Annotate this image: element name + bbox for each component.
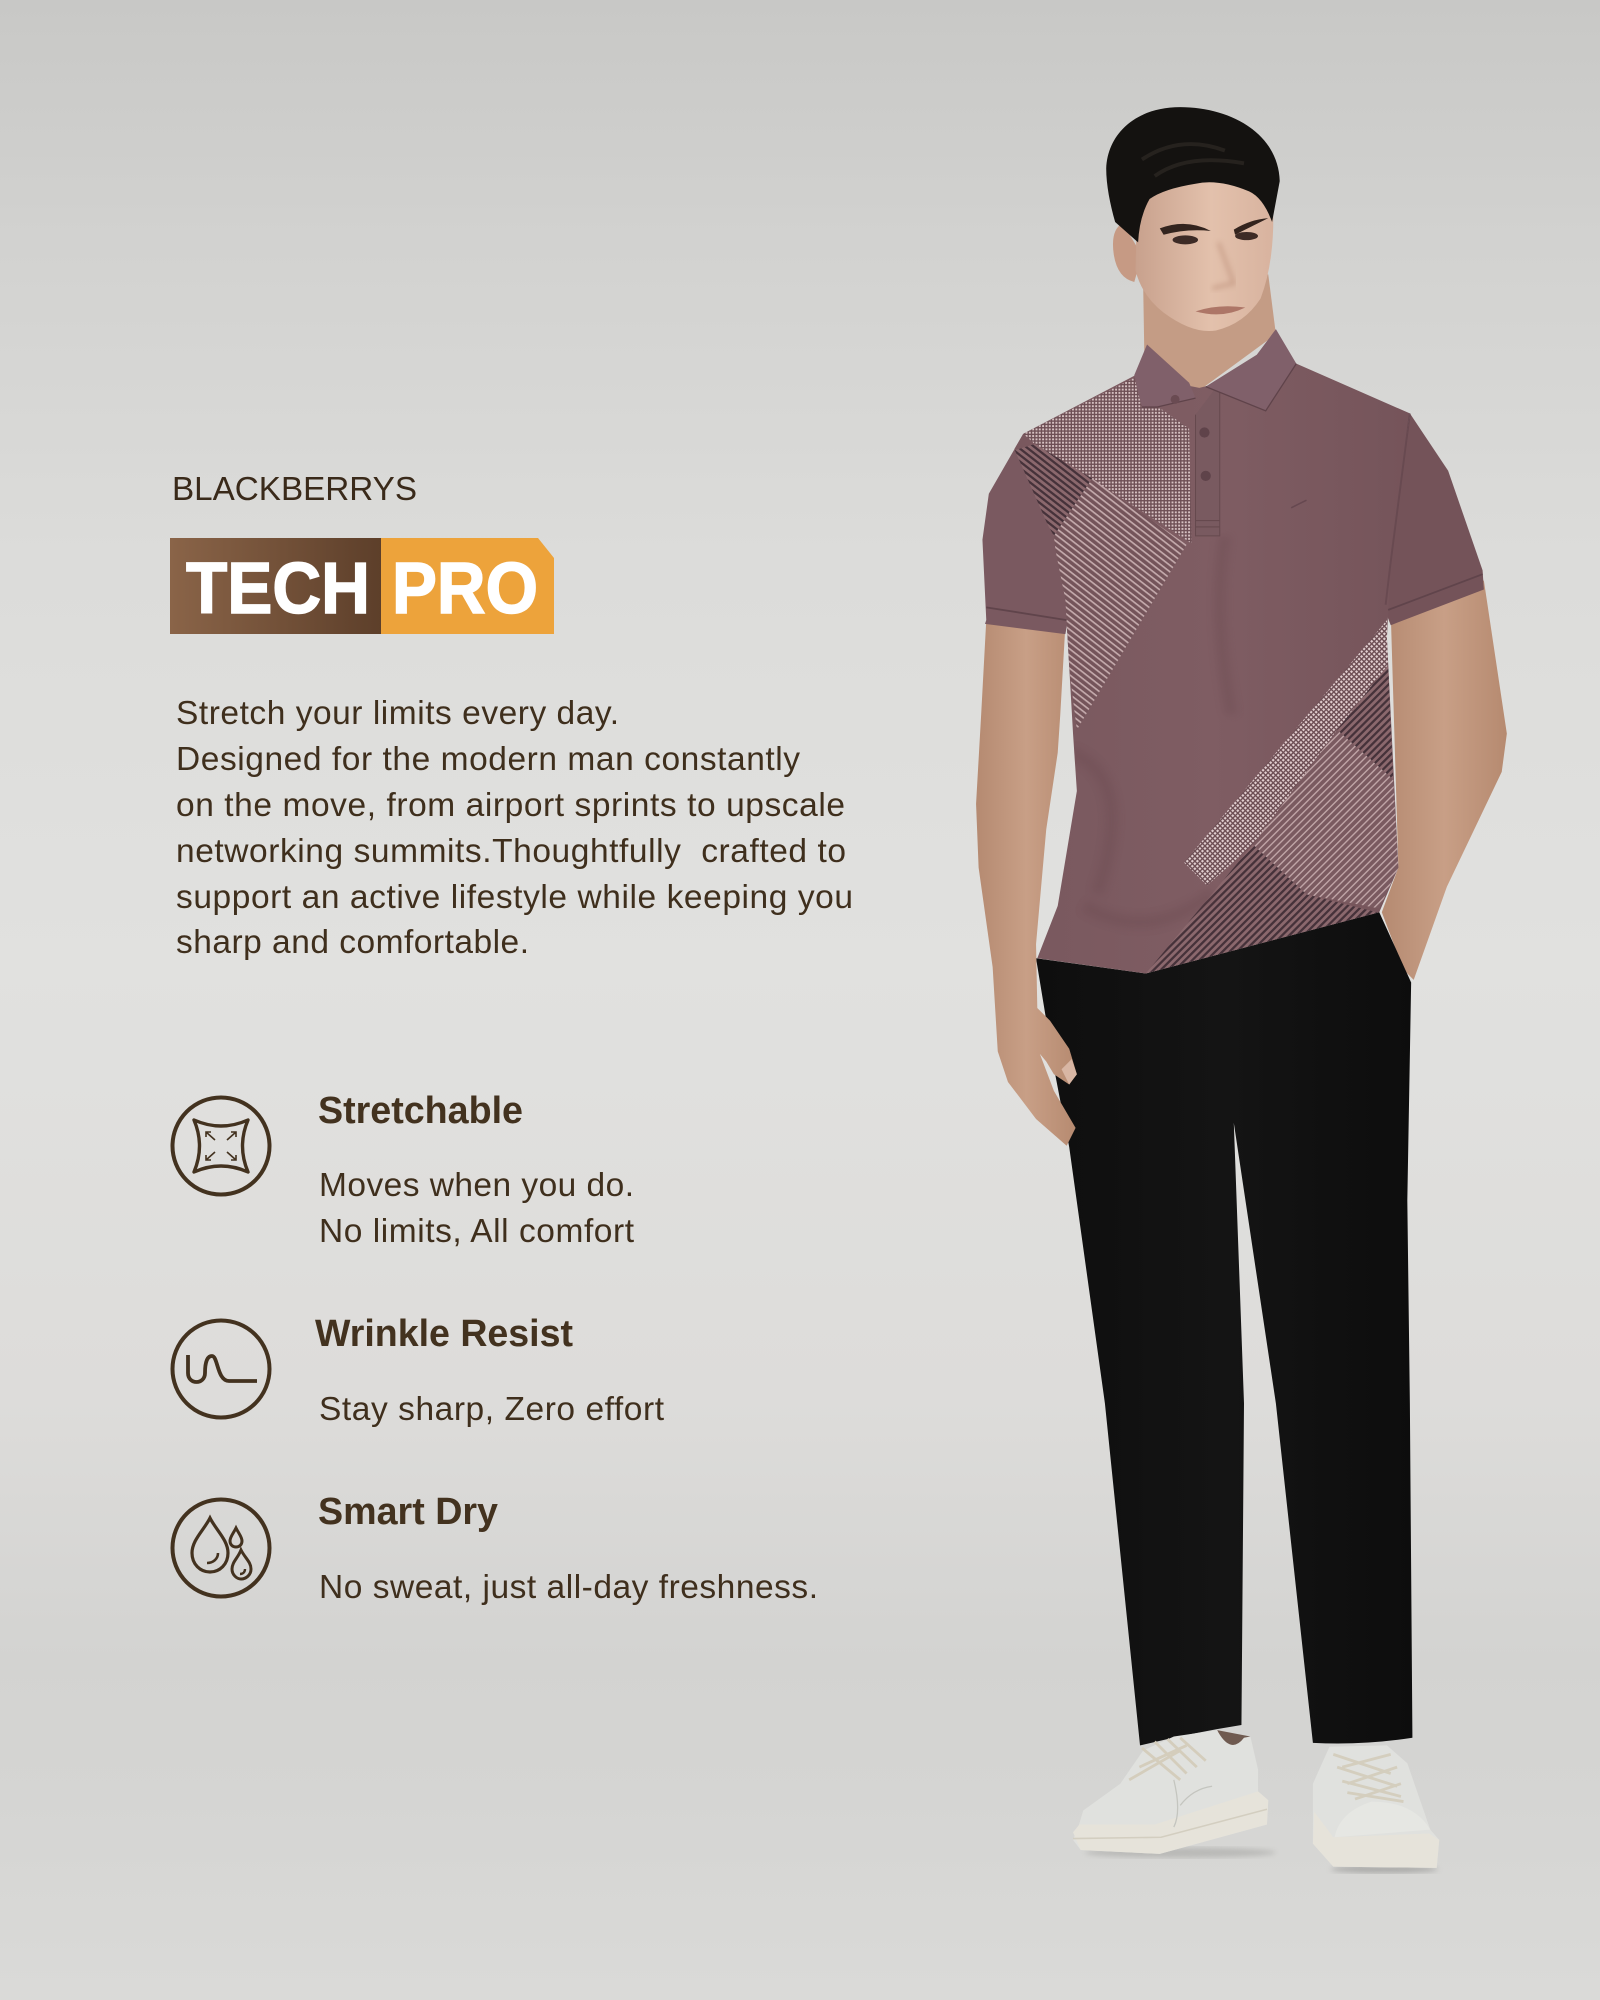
feature: smart dry: No sweat, just all-day freshness. <box>319 1569 818 1606</box>
brand name: BLACKBERRYS <box>172 470 417 507</box>
feature: wrinkle resist: Wrinkle Resist <box>315 1313 573 1355</box>
trousers <box>1036 912 1412 1745</box>
icon: stretch <box>172 1098 270 1194</box>
logo: Tech Pro badge: PRO <box>392 549 538 629</box>
left sleeve <box>982 434 1072 634</box>
hair <box>1106 107 1280 242</box>
feature: stretchable: Stretchable <box>318 1090 523 1132</box>
collar <box>1134 344 1196 407</box>
icon: water drops <box>172 1500 270 1596</box>
intro paragraph: networking summits.Thoughtfully crafted to <box>176 833 846 870</box>
nose and cheek shading <box>1212 242 1234 288</box>
logo: Tech Pro badge <box>170 538 554 634</box>
intro paragraph <box>176 695 853 961</box>
neck <box>1143 274 1276 390</box>
feature: smart dry: Smart Dry <box>318 1491 498 1533</box>
right arm <box>1382 581 1507 980</box>
head <box>1106 107 1280 331</box>
shirt print <box>1014 378 1398 974</box>
floor shadows <box>1085 1848 1276 1858</box>
buttons <box>1171 395 1180 404</box>
logo: Tech Pro badge: TECH <box>186 549 370 629</box>
eyebrows <box>1160 224 1211 235</box>
sleeve cuffs <box>986 574 1483 620</box>
feature: smart dry <box>172 1491 818 1606</box>
intro paragraph: Stretch your limits every day. <box>176 695 619 732</box>
left shoe <box>1073 1730 1268 1854</box>
torso <box>1014 364 1410 974</box>
left arm and hand <box>976 620 1077 1146</box>
eyes <box>1173 235 1198 244</box>
intro paragraph: on the move, from airport sprints to upscale <box>176 787 845 824</box>
feature: wrinkle resist: Stay sharp, Zero effort <box>319 1391 665 1428</box>
intro paragraph: Designed for the modern man constantly <box>176 741 800 778</box>
ear <box>1113 223 1142 282</box>
right sleeve <box>1384 413 1484 625</box>
shirt <box>982 329 1484 974</box>
mouth <box>1196 306 1245 314</box>
feature: stretchable <box>172 1090 635 1250</box>
icon: wrinkle line <box>172 1320 270 1418</box>
intro paragraph: support an active lifestyle while keeping you <box>176 879 853 916</box>
intro paragraph: sharp and comfortable. <box>176 924 529 961</box>
chest logo <box>1291 500 1307 508</box>
face <box>1136 172 1273 331</box>
feature: wrinkle resist <box>172 1313 665 1428</box>
feature: stretchable: Moves when you do. <box>319 1167 634 1204</box>
placket <box>1196 383 1220 536</box>
right shoe <box>1313 1745 1439 1868</box>
feature: stretchable: No limits, All comfort <box>319 1213 635 1250</box>
model photo illustration <box>976 107 1507 1873</box>
